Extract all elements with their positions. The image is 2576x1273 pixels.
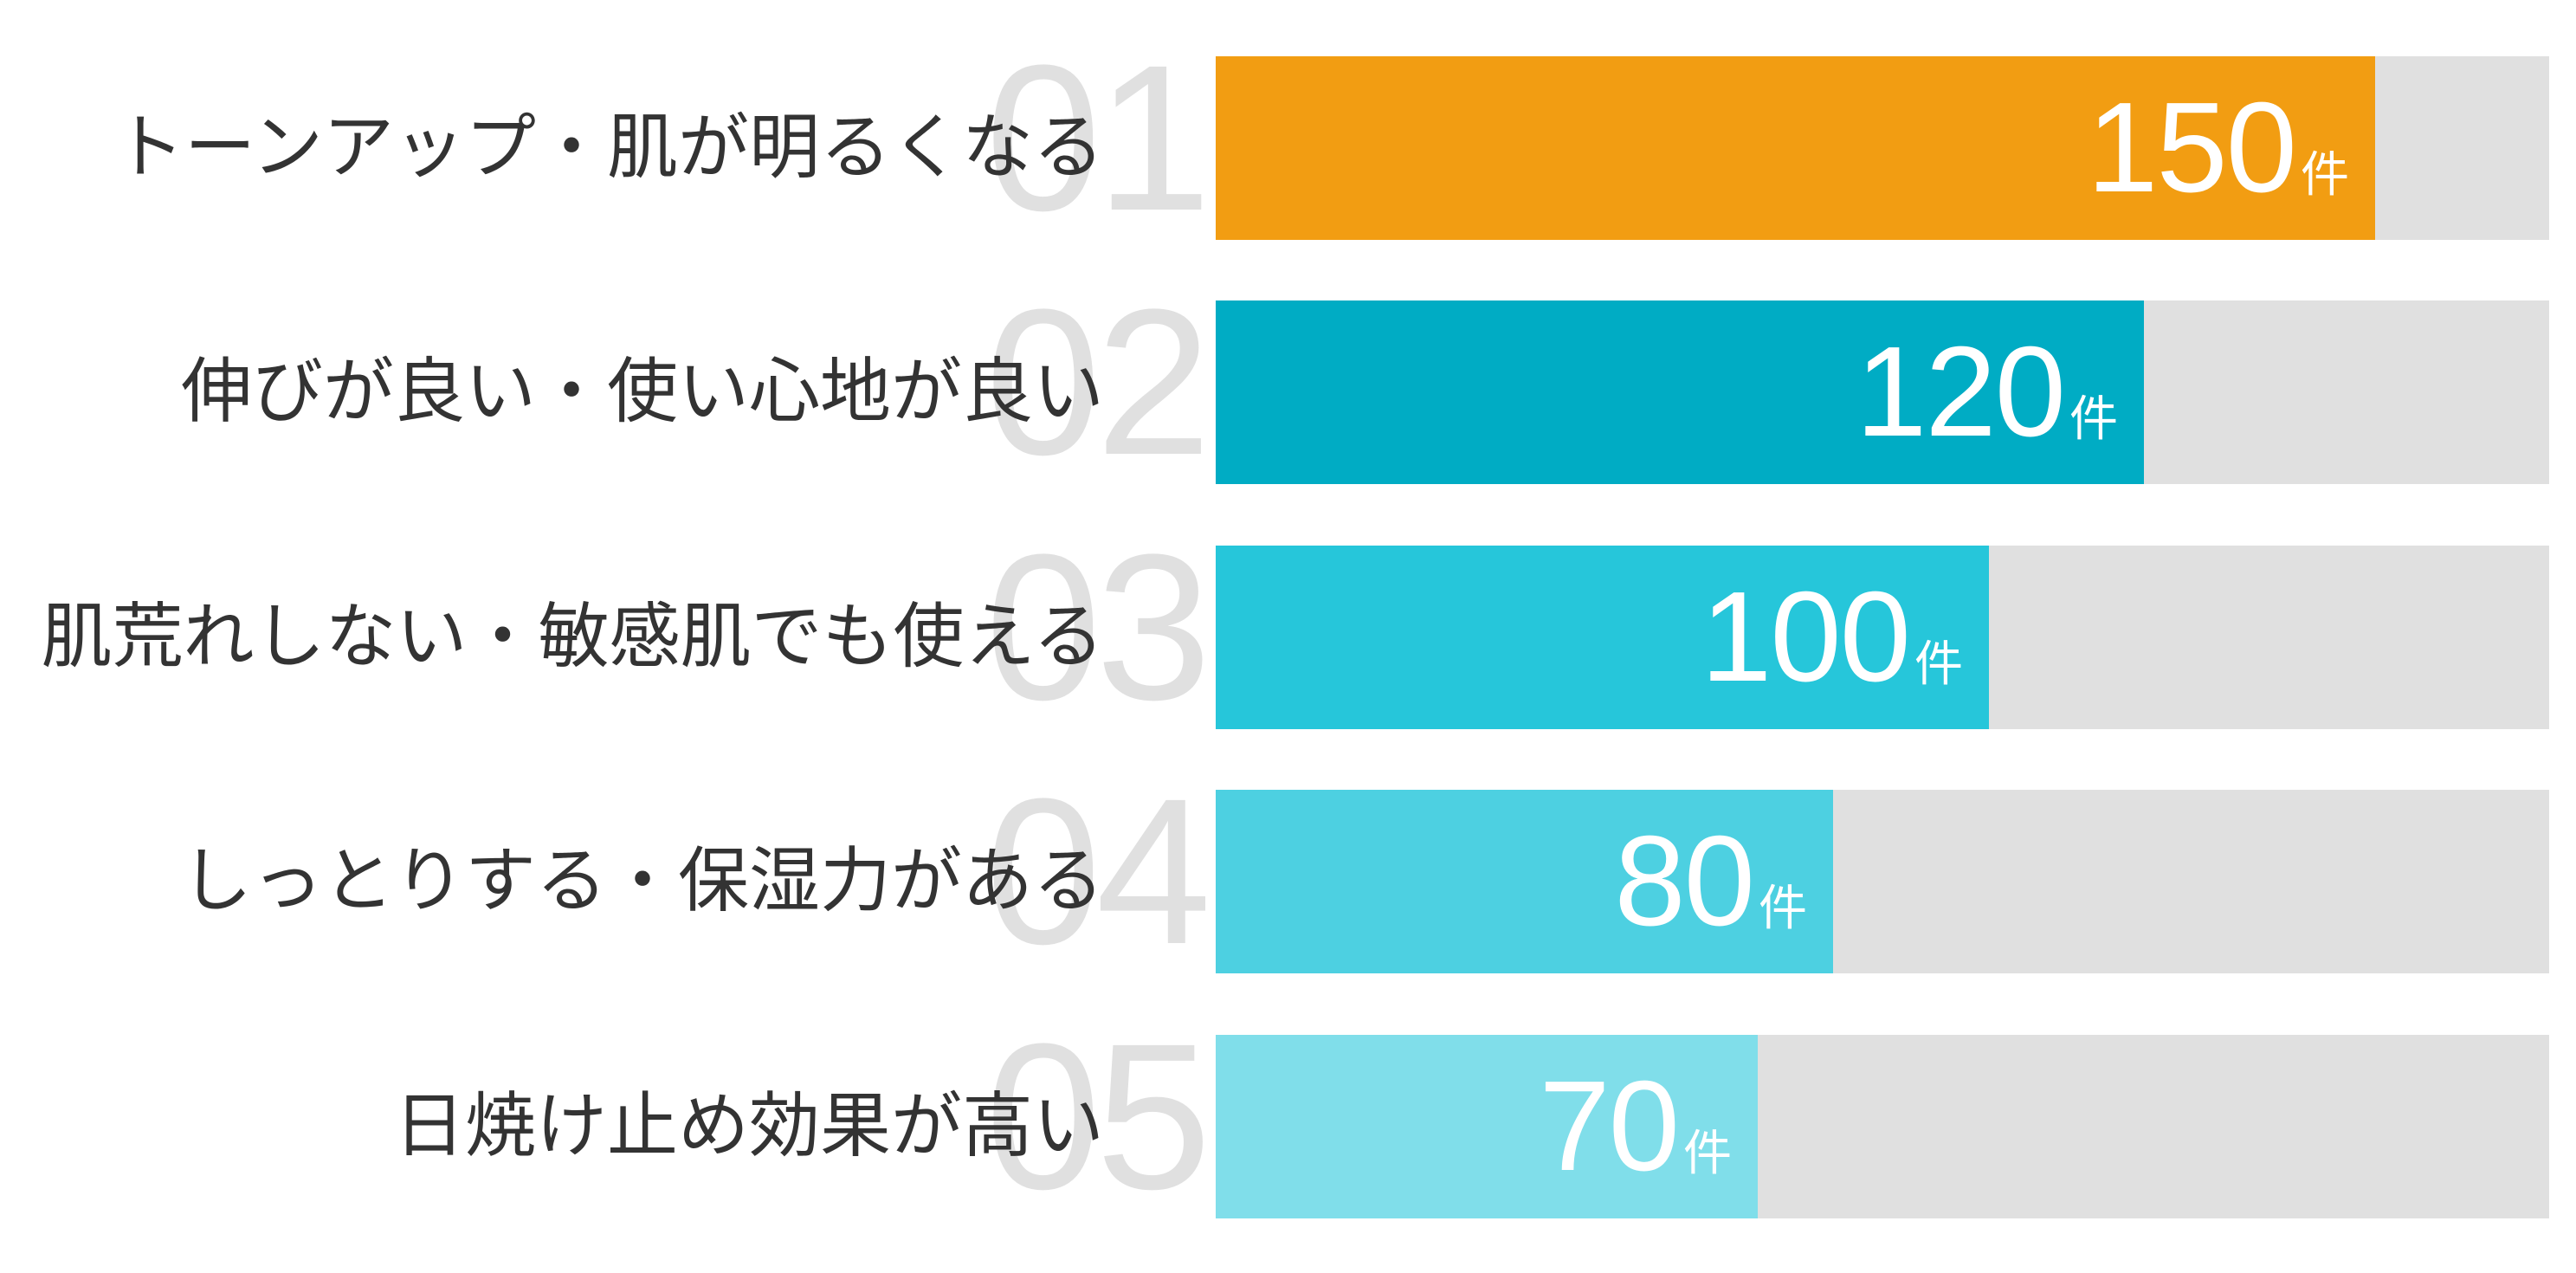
label 4: しっとりする・保湿力がある	[181, 842, 1104, 921]
bar 1: 150件	[2087, 76, 2349, 219]
bar 2: 120件	[1856, 320, 2118, 463]
label 5: 日焼け止め効果が高い	[394, 1087, 1104, 1166]
row 1	[113, 22, 2549, 254]
row 5	[394, 1000, 2549, 1232]
ghost number 02: 02	[985, 266, 1206, 498]
bar 5: 70件	[1539, 1055, 1732, 1198]
bar 3	[1216, 546, 2549, 729]
row 3	[41, 511, 2549, 743]
ghost number 03: 03	[985, 511, 1206, 743]
bar 2	[1216, 300, 2549, 484]
label 2: 伸びが良い・使い心地が良い	[181, 352, 1104, 431]
row 4	[181, 755, 2549, 987]
bar 4	[1216, 790, 2549, 973]
ghost number 04: 04	[985, 755, 1206, 987]
row 2	[181, 266, 2549, 498]
ghost number 05: 05	[985, 1000, 1206, 1232]
ghost number 01: 01	[985, 22, 1206, 254]
label 3: 肌荒れしない・敏感肌でも使える	[41, 598, 1104, 676]
label 1: トーンアップ・肌が明るくなる	[113, 108, 1104, 187]
bar 4: 80件	[1614, 810, 1807, 953]
bar 3: 100件	[1701, 565, 1963, 708]
bar 1	[1216, 56, 2549, 240]
bar 5	[1216, 1035, 2549, 1218]
